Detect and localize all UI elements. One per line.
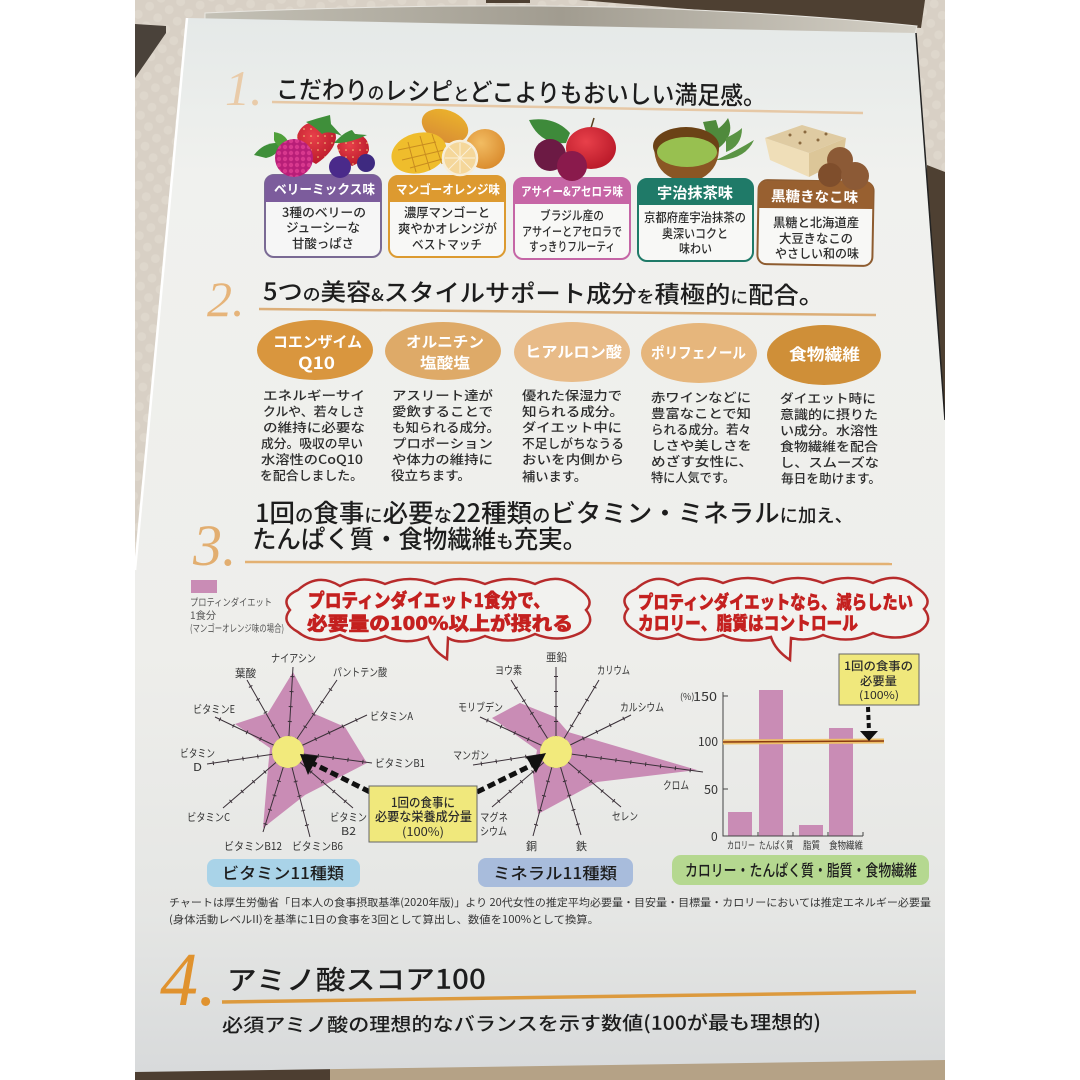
ingredient text 1: エネルギーサイ: [263, 385, 365, 404]
ingredient text 4: られる成分。若々: [651, 419, 751, 438]
label pill: minerals: ミネラル11種類: [493, 860, 617, 884]
vitamin axis labels: ビタミンC: [187, 809, 230, 825]
ingredient text 4: [651, 387, 753, 486]
label pill: macro nutrients: カロリー・たんぱく質・脂質・食物繊維: [685, 857, 917, 881]
section 4 rule: [222, 992, 916, 1002]
footnote: [169, 895, 932, 927]
ingredient text 2: [391, 385, 500, 484]
callout: nutrient requirement: 1回の食事に: [391, 792, 455, 811]
ingredient text 1: クルや、若々しさ: [263, 401, 365, 420]
speech bubble left: 必要量の100%以上が摂れる: [307, 609, 573, 636]
category labels: 食物繊維: [829, 837, 863, 852]
category labels: 脂質: [803, 837, 820, 852]
arrow: callout to mineral chart: [477, 753, 546, 792]
vitamin axis labels: B2: [341, 823, 356, 839]
flavor card: acai acerola: [514, 178, 630, 259]
radar chart: minerals: [453, 649, 703, 854]
ingredient text 3: おいを内側から: [522, 449, 624, 468]
ingredient text 1: [260, 385, 365, 484]
flavor card: berry mix: ベリーミックス味: [274, 179, 375, 198]
value axis labels: 150: [693, 688, 717, 705]
speech bubble left: [286, 579, 590, 659]
flavor card: uji matcha: [638, 179, 753, 261]
section 3 heading: 1回の食事に必要な22種類のビタミン・ミネラルに加え、: [255, 494, 853, 530]
callout: nutrient requirement: (100%): [402, 823, 444, 840]
flavor card: kokuto kinako: [757, 180, 874, 266]
section 4 description: 必須アミノ酸の理想的なバランスを示す数値(100が最も理想的): [222, 1008, 821, 1038]
flavor card: kokuto kinako: 黒糖と北海道産: [773, 212, 859, 231]
ingredient: polyphenol: [641, 323, 757, 383]
ingredient text 2: 愛飲することで: [392, 401, 493, 420]
mineral axis labels: マグネ: [480, 809, 508, 825]
speech bubble right: プロティンダイエットなら、減らしたい: [638, 589, 913, 615]
vitamin axis labels: パントテン酸: [333, 664, 387, 680]
flavor card: uji matcha: 奥深いコクと: [662, 223, 728, 242]
ingredient text 4: 赤ワインなどに: [651, 387, 751, 406]
section 2 number: 2.: [207, 271, 244, 327]
category labels: カロリー: [727, 837, 755, 852]
section 4 heading: アミノ酸スコア100: [227, 958, 486, 998]
photo background: [135, 0, 945, 1080]
flavor card: uji matcha: 宇治抹茶味: [657, 182, 733, 203]
legend: プロティンダイエット: [190, 594, 272, 609]
mineral axis labels: カルシウム: [620, 699, 664, 715]
ingredient: coenzyme Q10: Q10: [298, 349, 335, 374]
ingredient text 4: めざす女性に、: [651, 451, 753, 470]
ingredient text 5: [780, 388, 881, 487]
label pill: vitamins: ビタミン11種類: [222, 860, 344, 884]
value axis labels: 50: [704, 781, 718, 798]
flavor card: kokuto kinako: 黒糖きなこ味: [771, 185, 859, 208]
ingredient: hyaluronic acid: [514, 322, 630, 382]
100 percent reference line: [723, 741, 884, 742]
ingredient text 5: ダイエット時に: [780, 388, 876, 407]
section 1 number: 1.: [225, 60, 262, 116]
speech bubble right: [624, 578, 928, 660]
section 3 rule: [245, 562, 892, 564]
flavor card: acai acerola: ブラジル産の: [540, 205, 604, 224]
flavor card: berry mix: [265, 175, 381, 257]
flavor card: acai acerola: アサイー&アセロラ味: [521, 181, 623, 200]
mineral axis labels: 亜鉛: [546, 649, 567, 665]
illustration: acai and acerola: [529, 118, 616, 181]
callout: nutrient requirement: [369, 786, 477, 842]
ingredient text 5: し、スムーズな: [780, 452, 879, 471]
ingredient text 3: ダイエット中に: [522, 417, 622, 436]
arrow: callout to vitamin chart: [300, 754, 370, 792]
ingredient text 4: 特に人気です。: [651, 467, 735, 486]
box top flap: [205, 6, 917, 34]
illustration: matcha bowl: [653, 118, 754, 178]
footnote: チャートは厚生労働省「日本人の食事摂取基準(2020年版)」より 20代女性の推定平均必要量・目安量・目標量・カロリーにおいては推定エネルギー必要量: [169, 895, 932, 910]
ingredient text 2: プロポーション: [392, 433, 493, 452]
vitamin axis labels: ビタミンA: [370, 708, 413, 724]
callout: required amount: (100%): [859, 687, 899, 703]
mineral axis labels: モリブデン: [458, 699, 503, 715]
illustration: kinako masu and kokuto: [765, 125, 869, 190]
section 2 rule: [259, 309, 876, 315]
speech bubble right: カロリー、脂質はコントロール: [638, 610, 858, 636]
legend: (マンゴーオレンジ味の場合): [190, 620, 284, 635]
vitamin axis labels: [180, 650, 425, 854]
ingredient text 4: 豊富なことで知: [651, 403, 751, 422]
category labels: たんぱく質: [759, 837, 793, 852]
box right edge: [916, 33, 945, 420]
flavor card: acai acerola: すっきりフルーティ: [529, 236, 615, 255]
vitamin axis labels: D: [193, 759, 202, 775]
section 1 heading: こだわりのレシピとどこよりもおいしい満足感。: [276, 70, 766, 113]
vitamin axis labels: ビタミンE: [193, 701, 235, 717]
ingredient text 3: 優れた保湿力で: [522, 385, 622, 404]
ingredient text 2: や体力の維持に: [392, 449, 493, 468]
mineral axis labels: シウム: [480, 823, 507, 839]
flavor card: acai acerola: アサイーとアセロラで: [522, 221, 622, 240]
vitamin axis labels: ビタミンB1: [375, 755, 425, 771]
speech bubble left: プロティンダイエット1食分で、: [308, 586, 550, 613]
flavor card: mango orange: 爽やかオレンジが: [398, 218, 497, 237]
illustration: mango and orange: [387, 103, 505, 180]
callout: required amount: 1回の食事の: [844, 658, 913, 674]
ingredient: dietary fiber: [767, 325, 881, 385]
callout: required amount: 必要量: [860, 673, 897, 689]
ingredient text 1: を配合しました。: [260, 465, 363, 484]
mineral axis labels: 鉄: [576, 838, 587, 854]
flavor card: kokuto kinako: 大豆きなこの: [779, 228, 853, 247]
ingredient text 2: 役立ちます。: [391, 465, 471, 484]
flavor card: berry mix: 甘酸っぱさ: [292, 233, 354, 252]
bar chart: calories protein fat fiber: [680, 688, 884, 852]
flavor card: uji matcha: 京都府産宇治抹茶の: [644, 207, 746, 226]
ingredient text 1: の維持に必要な: [263, 417, 365, 436]
section 3: [169, 494, 932, 927]
ingredient text 1: 成分。吸収の早い: [261, 433, 363, 452]
flavor card: mango orange: マンゴーオレンジ味: [396, 179, 500, 198]
mineral axis labels: セレン: [612, 808, 638, 824]
value axis labels: [680, 688, 718, 845]
ingredient text 5: 意識的に摂りた: [780, 404, 878, 423]
flavor card: kokuto kinako: やさしい和の味: [775, 243, 859, 262]
ingredient text 3: [522, 385, 624, 485]
ingredient text 4: しさや美しさを: [651, 435, 752, 454]
label pill: macro nutrients: [672, 855, 929, 885]
ingredient: polyphenol: ポリフェノール: [651, 342, 746, 363]
ingredient text 3: 知られる成分。: [522, 401, 624, 420]
box panel: [135, 18, 945, 1072]
legend: [190, 580, 284, 635]
ingredient: ornithine: [385, 322, 501, 380]
mineral axis labels: マンガン: [453, 747, 489, 763]
value axis labels: 0: [711, 828, 718, 845]
vitamin axis labels: ビタミンB12: [224, 838, 282, 854]
section 1: [225, 60, 874, 266]
bars: [728, 690, 853, 836]
ingredient text 1: 水溶性のCoQ10: [261, 449, 363, 468]
callout: nutrient requirement: 必要な栄養成分量: [375, 806, 472, 825]
vitamin axis labels: ビタミン: [330, 809, 367, 825]
flavor card: mango orange: [389, 176, 505, 257]
flavor card: berry mix: 3種のベリーの: [282, 202, 366, 221]
ingredient text 2: も知られる成分。: [392, 417, 500, 436]
ingredient: hyaluronic acid: ヒアルロン酸: [525, 341, 622, 362]
section 3 number: 3.: [192, 513, 236, 578]
flavor card: uji matcha: 味わい: [679, 238, 712, 257]
section 2: [207, 271, 881, 487]
ingredient: ornithine: オルニチン: [406, 331, 484, 352]
section 4: [160, 938, 916, 1038]
ingredient: ornithine: 塩酸塩: [420, 352, 470, 373]
value axis labels: 100: [698, 733, 718, 750]
ingredient text 5: 毎日を助けます。: [781, 468, 881, 487]
vitamin axis labels: ビタミン: [180, 745, 215, 761]
callout: required amount: [839, 654, 919, 705]
ingredient: coenzyme Q10: コエンザイム: [273, 331, 362, 352]
section 3 heading: [252, 494, 853, 556]
flavor card: mango orange: ベストマッチ: [412, 234, 482, 253]
flavor card: berry mix: ジューシーな: [286, 217, 360, 236]
section 3 heading: たんぱく質・食物繊維も充実。: [252, 520, 587, 556]
box left highlight: [135, 18, 187, 570]
mineral axis labels: [453, 649, 689, 854]
vitamin axis labels: ビタミンB6: [292, 838, 343, 854]
mineral axis labels: 銅: [526, 838, 537, 854]
vitamin axis labels: ナイアシン: [271, 650, 316, 666]
ingredient text 2: アスリート達が: [392, 385, 494, 404]
section 1 rule: [272, 102, 863, 113]
vitamin axis labels: 葉酸: [235, 665, 256, 681]
mineral axis labels: カリウム: [597, 662, 630, 678]
ingredient text 3: 不足しがちなうる: [522, 433, 624, 452]
legend: 1食分: [190, 607, 216, 622]
ingredient: dietary fiber: 食物繊維: [789, 341, 860, 365]
illustration: berries: [254, 115, 375, 178]
ingredient text 5: い成分。水溶性: [780, 420, 878, 439]
ingredient text 3: 補います。: [522, 466, 587, 485]
mineral axis labels: ヨウ素: [495, 662, 522, 678]
mineral axis labels: クロム: [663, 777, 689, 793]
section 4 number: 4.: [160, 938, 217, 1022]
category labels: [727, 837, 863, 852]
axes: [723, 692, 863, 836]
label pill: minerals: [478, 858, 633, 887]
section 2 heading: 5つの美容&スタイルサポート成分 を積極的に配合。: [263, 272, 824, 311]
footnote: (身体活動レベルII)を基準に1日の食事を3回として算出し、数値を100%として換算。: [169, 912, 599, 927]
ingredient: coenzyme Q10: [257, 320, 373, 380]
radar chart: vitamins: [180, 650, 425, 854]
arrow: required amount to line: [860, 707, 878, 741]
flavor card: mango orange: 濃厚マンゴーと: [404, 202, 490, 221]
ingredient text 5: 食物繊維を配合: [780, 436, 879, 455]
label pill: vitamins: [207, 859, 360, 887]
value axis labels: (%): [680, 690, 694, 703]
